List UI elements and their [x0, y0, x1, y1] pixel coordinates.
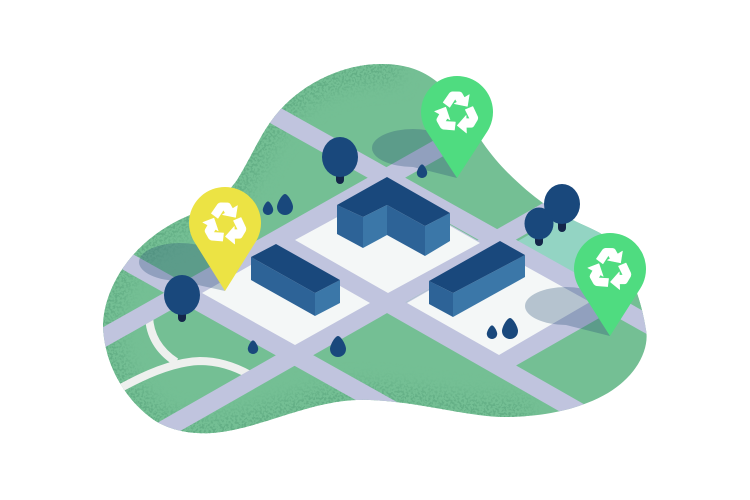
road: lower diagonal [122, 254, 397, 402]
teal plot [518, 220, 602, 272]
road: middle diagonal [282, 240, 584, 412]
road: upper diagonal [270, 108, 646, 334]
stippled edge texture [103, 66, 530, 433]
location pin: green right [574, 233, 646, 336]
footpath [120, 320, 250, 390]
illustration: isometric recycling map [103, 64, 647, 434]
icon: recycle arrows [197, 196, 246, 245]
road: centre cross street [158, 203, 544, 431]
lot: left [202, 261, 370, 345]
shrub: large top left [277, 194, 293, 215]
lot: centre [295, 205, 480, 293]
green sliver right of pin [637, 294, 643, 314]
tree: right front [524, 208, 554, 246]
shrub: below top pin [417, 164, 427, 178]
lot: right [407, 251, 590, 355]
tree: left [164, 275, 200, 322]
building: L-shaped centre block [337, 177, 450, 256]
map land: clipped blob with roads and lots [103, 64, 647, 434]
building: right block [429, 241, 525, 317]
pin shadow: left [139, 243, 225, 291]
road network [103, 108, 646, 431]
road: right cross street [500, 304, 599, 366]
pin shadow: top [372, 129, 457, 178]
location pin: yellow left [189, 187, 261, 291]
shrub: small top left [263, 201, 273, 215]
location pin: green top [421, 76, 493, 178]
road: left cross street [103, 141, 443, 347]
icon: recycle arrows [429, 85, 478, 134]
green land base [103, 64, 647, 434]
tree: right back [544, 184, 580, 232]
shrub: small lower left [248, 340, 258, 354]
pin shadow: right [525, 287, 610, 336]
tree: top centre [322, 137, 358, 184]
building: left block [251, 244, 340, 316]
shrub: small right lot [487, 325, 497, 339]
shrub: large right lot [502, 318, 518, 339]
shrub: large lower centre [330, 336, 346, 357]
icon: recycle arrows [582, 241, 631, 291]
